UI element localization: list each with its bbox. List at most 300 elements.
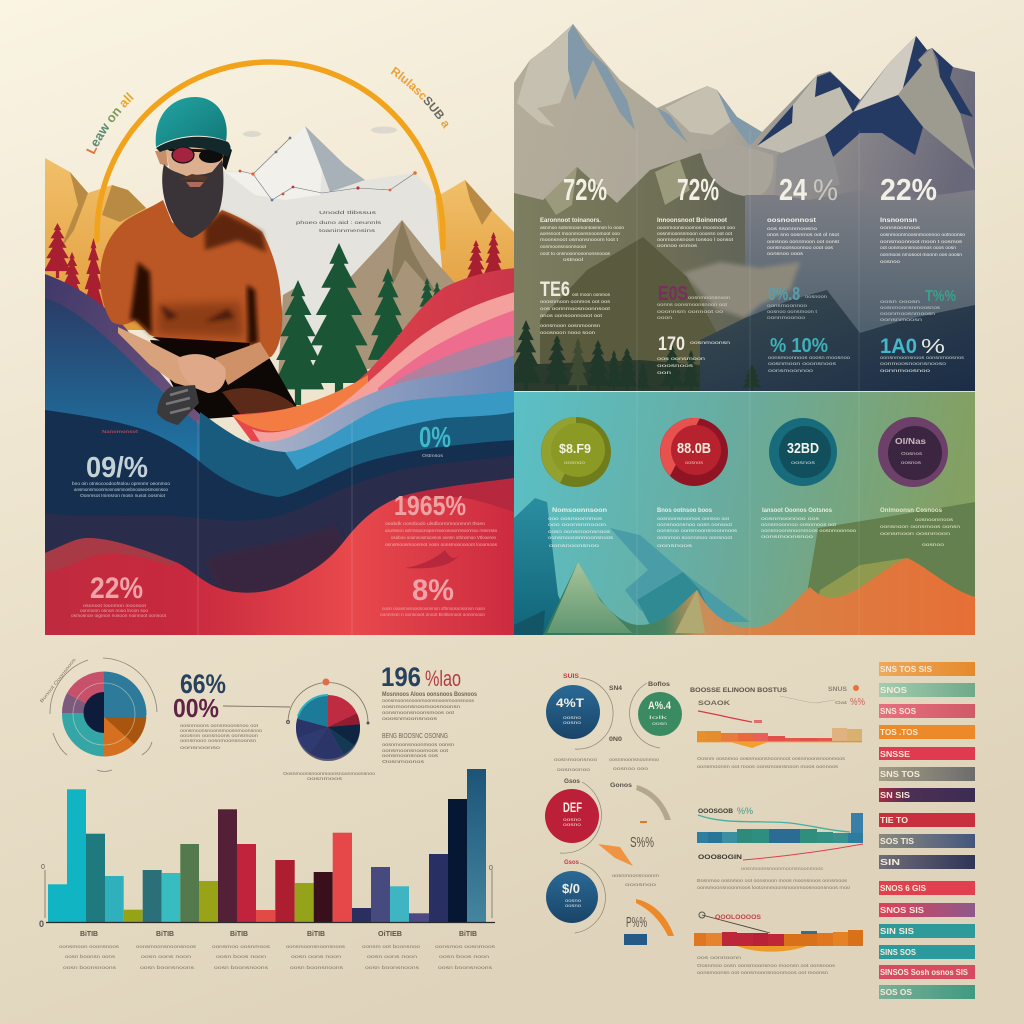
stat column one: asnmoo sotnmnoomontosmnon lo ooon xyxy=(540,225,624,230)
stat row three fourth: oonsnmoonsnoos oonsnmoosnos xyxy=(880,355,965,360)
stat: red 22%: osmosnon oigmon nosoon noinnoot oonnoot xyxy=(71,613,167,618)
stat row two fourth: oonsnmoosn xyxy=(880,317,923,322)
category descriptions: oosn boonsnoons xyxy=(214,965,269,970)
blue ridge shadows xyxy=(568,24,762,146)
donut chart one xyxy=(39,656,157,772)
stat row three second: oon xyxy=(657,370,672,375)
text column one: ooo ooonsnmooon xyxy=(548,522,607,527)
navy peaks xyxy=(700,290,975,391)
circle stat: red: DEF xyxy=(563,799,582,815)
stat row three third xyxy=(768,335,851,373)
text column four: oonsmoon oosnmoon xyxy=(880,531,951,536)
hand xyxy=(178,354,226,393)
blue wave xyxy=(45,298,200,462)
mini chart one: SNUS xyxy=(828,686,848,693)
mini chart one: %% xyxy=(850,697,865,708)
stat column one: Earonnoot toinanors. xyxy=(540,217,601,224)
donut outer arcs xyxy=(50,658,157,772)
stat: red 22%: oonmonn osnon nooo lnoon soo xyxy=(80,608,148,613)
stat row three third: oonsmoonnoo xyxy=(768,368,814,373)
circle stat: red: oosno xyxy=(563,822,582,827)
legend labels: SIN SIS xyxy=(880,927,915,936)
stat row three second: ooosnoos xyxy=(657,363,694,368)
stat row three second: oosnmoonsn xyxy=(690,340,731,345)
text column four xyxy=(880,507,961,547)
slate slope xyxy=(745,190,975,391)
text column three: oonsmoonsnoo xyxy=(761,534,814,539)
circle: purple: oosnos xyxy=(901,460,922,465)
pink wave xyxy=(378,310,514,391)
circle: olive xyxy=(541,417,611,487)
circle stat: blue one: SUIS xyxy=(563,673,580,680)
wedge caption: oosnmoonsnoonm xyxy=(612,873,659,878)
mini chart three: OOOLOOOOS xyxy=(715,914,762,921)
stat: red 22%: osonoot loonmon inoonoot xyxy=(83,603,147,608)
axis labels: 0 xyxy=(489,865,493,872)
orange-green hills foreground xyxy=(543,558,975,635)
stat column three: % xyxy=(813,174,838,207)
forearm left xyxy=(118,327,192,388)
stat row two fourth: oosn ooosn xyxy=(880,299,921,304)
snow mountain xyxy=(219,170,442,364)
legend labels: SNSSE xyxy=(880,750,911,759)
navy faces xyxy=(757,36,973,157)
stat column four: oonnsoosnoos xyxy=(880,225,921,230)
brown mountain xyxy=(347,220,454,370)
stat column four: oot oonmoonsnoonmos ooos oosn xyxy=(880,245,956,250)
pie chart two xyxy=(283,678,376,781)
text column three: Iansoot Ooonos Ootsnos xyxy=(762,507,832,514)
circle stat: blue one: oosno xyxy=(563,720,582,725)
stat column three: oonsmoonsoonnoo ooot oos xyxy=(767,245,834,250)
stat row two third: 0%.8 xyxy=(768,284,800,304)
text column three: oosnmoonnoo oos xyxy=(761,516,820,521)
text column two: oosnmoo soonnmoo oonsnoot xyxy=(657,535,733,540)
stat column two: Innoonsnoot Boinonoot xyxy=(657,217,728,224)
stat row three third: oosnmoon ooonsnoos xyxy=(768,361,837,366)
stat row three second: 170 xyxy=(658,334,685,355)
donut rotated label: Bunoot Ooonsnoos xyxy=(39,656,77,704)
text column one xyxy=(548,507,614,548)
stat column four: oosnoo xyxy=(880,259,901,264)
mountain shadows xyxy=(60,172,492,250)
category descriptions: oonsmoo oosnmoos xyxy=(212,944,271,949)
legend labels: SNS SOS xyxy=(880,707,917,716)
person: hat band xyxy=(156,137,231,157)
teal deep wave xyxy=(200,412,514,497)
teal ridge lower xyxy=(637,572,715,625)
category descriptions: oosn boonsnoons xyxy=(63,965,117,970)
stat row two third: oosnoon xyxy=(805,294,828,299)
panel: teal circles xyxy=(514,392,975,635)
stat: navy 09%: bno oin otnsocoodoohtolou opmnmr oeonmoo xyxy=(72,481,170,486)
legend labels xyxy=(880,665,969,997)
text column one: ooo oosmoonnmos xyxy=(548,516,603,521)
legend labels: SOS TIS xyxy=(880,837,915,846)
stat: red 1965%: osnomoonmoonmot nosn oonsmoonooont looomoos xyxy=(385,542,498,547)
fold lines xyxy=(198,420,352,635)
teal mountain left xyxy=(514,498,575,635)
circle: purple xyxy=(878,417,948,487)
forearm right xyxy=(215,342,270,385)
stat column one: ooot to onsnoonnooononsnooos xyxy=(540,251,611,256)
stat row three second xyxy=(657,334,731,375)
text column two: Bnos ootnsoo boos xyxy=(657,507,712,514)
stat column four: oosnmoonmoosnmoonnoo ootnoonso xyxy=(880,232,965,237)
stat: 196% block xyxy=(381,662,477,764)
stat row two second: oonns oonsmoonsnoon oot xyxy=(657,302,728,307)
stat: 66% and 00% xyxy=(173,669,290,750)
stat: 66% and 00%: ooosnm oonsnoons oonsmoon xyxy=(180,733,259,738)
circle: red: oosnos xyxy=(685,460,704,465)
stat: red 22%: 22% xyxy=(90,572,143,605)
mountain caption: Unodd tlibssus xyxy=(319,210,377,215)
stat row two left: oonsmoon oosnmoonsn xyxy=(540,323,601,328)
circle: red: 88.0B xyxy=(677,440,711,457)
legend labels: SINSOS Sosh osnos SIS xyxy=(880,968,969,977)
maroon crest right xyxy=(400,478,515,512)
category descriptions xyxy=(59,944,496,970)
mini chart one: oonsmoonsn oot moos oonsmoonsnoon moos oonnoos xyxy=(697,764,839,769)
stat column three: oosnoonnost xyxy=(767,217,817,224)
snow highlights left xyxy=(517,24,737,135)
right mid peak xyxy=(898,48,975,170)
stat row three fourth xyxy=(880,335,965,373)
stat row two left: onos oonsoonnooot oot xyxy=(540,313,603,318)
category descriptions: oosn boonsnoons xyxy=(290,965,344,970)
circle stat: blue one: oosno xyxy=(563,715,582,720)
snow right xyxy=(853,36,916,113)
stat: 196% block: oosnmoonsnoomoosnoonsn xyxy=(382,704,461,709)
stat column three: oonsnoo ooos xyxy=(767,251,804,256)
circle stat: blue two xyxy=(546,859,605,933)
stat: 196% block: %lao xyxy=(425,666,461,691)
text column two xyxy=(657,507,738,548)
snow center xyxy=(757,75,853,155)
stat row two third: oonsmoonnoo xyxy=(767,303,808,308)
stat: red 8% xyxy=(380,574,485,617)
trouser highlight xyxy=(222,388,298,414)
dark olive peak xyxy=(540,237,720,391)
stat row two second: ooon xyxy=(657,315,673,320)
mini chart two: OOO8OGIN xyxy=(698,854,742,861)
mini chart two: oosnmoonsnoonmoonsnoonmoos xyxy=(741,866,824,871)
text column four: oosnoonmoos xyxy=(915,517,954,522)
axis labels: 0 xyxy=(39,919,44,929)
mini chart one: SOAOK xyxy=(698,700,730,707)
category descriptions: oosn boos noon xyxy=(216,954,267,959)
text column one: oonsnoonsnoo xyxy=(549,543,600,548)
maroon crest left xyxy=(45,538,178,573)
person: hair side xyxy=(218,140,232,170)
text column four: Onlmoonsn Cosnoos xyxy=(880,507,942,514)
text column one: Nomsoonnsoon xyxy=(552,507,607,514)
stat: 66% and 00%: oonsmoonsnoonsmoosnmoonsnoo xyxy=(180,728,262,733)
captions under circles xyxy=(554,757,660,772)
trousers xyxy=(150,340,300,420)
stat: red 22% xyxy=(71,572,167,618)
axes xyxy=(45,870,495,922)
circle stat: red: Gsos xyxy=(564,778,580,785)
striped legend bars xyxy=(879,662,975,999)
stat row two fourth xyxy=(880,288,956,322)
orange wave xyxy=(232,375,368,431)
stat row two left: oos oonnmoosnoonnsoot xyxy=(540,306,611,311)
stat row two left xyxy=(540,278,611,335)
stat column one xyxy=(540,172,624,262)
stat row two fourth: ooonmoosnmoosn xyxy=(880,311,936,316)
stat column four: 22% xyxy=(880,172,937,207)
stat row two second: oosnmoonsnoon xyxy=(688,295,731,300)
circle stat: green: oosn xyxy=(652,721,668,726)
gauge arc: orange xyxy=(636,899,674,936)
category labels: BiTIB xyxy=(80,931,98,938)
category descriptions: oosn oons noon xyxy=(367,954,418,959)
stat column four xyxy=(880,172,965,264)
stat: red 1965%: 1965% xyxy=(394,490,466,521)
green peak xyxy=(547,562,632,633)
panel: mountain statistics xyxy=(511,24,975,392)
stat: 196% block: oonsmoonsnoos oos xyxy=(382,753,439,758)
mountain caption: phoeo duno aid : oeunnls xyxy=(296,220,382,225)
panel: hiker poster: RlulascSUB a xyxy=(390,66,448,129)
stat column one: ostnool xyxy=(563,257,583,262)
stat: blue 0%: Ostmsos xyxy=(422,453,444,458)
mountain silhouette xyxy=(514,24,975,391)
stat column one: aonsnoot moonmoonsnoonmoot ooo xyxy=(540,231,620,236)
paler pine xyxy=(568,338,588,392)
stat column three: onos sno oosnmos oot ol nsot xyxy=(767,232,840,237)
teal ridge xyxy=(610,528,750,622)
stat: 196% block: oonsmoonsnoomoos oot xyxy=(382,748,449,753)
glove knuckles xyxy=(166,390,190,413)
circle: teal: 32BD xyxy=(787,440,819,457)
category descriptions: oosn boonsn oons xyxy=(65,954,116,959)
legend labels: TOS .TOS xyxy=(880,728,919,737)
stat: red 1965% xyxy=(385,490,498,547)
stat: 196% block: Mosnnoos Aloos oonsnoos Bosnoos xyxy=(382,691,477,698)
mountain caption: toaninnmensins xyxy=(319,228,376,233)
fold lines xyxy=(637,392,859,635)
small rock left xyxy=(278,288,294,375)
stat column two: ooonmoonsnoomon moonnoot ooo xyxy=(657,225,735,230)
stat: red 1965%: uaumsnon ootmnsooonopsnmnonosooonmsoonmoo nnmnmso xyxy=(385,528,497,533)
gauge arc: tan xyxy=(636,785,671,820)
circle stat: blue two: Gsos xyxy=(564,859,579,866)
mini chart one: Oosnm oosnmoo oosnmoonsnoonnoot oosnmoonsnoonmoos xyxy=(697,756,846,761)
circle stat: green: Boflos xyxy=(648,681,670,688)
olive hills xyxy=(514,153,790,391)
dark ground xyxy=(514,360,760,391)
circle stat: red xyxy=(545,778,601,853)
stat: 196% block: oonsmoonsnoonsmoos oot xyxy=(382,710,455,715)
text column four: oosnoo xyxy=(922,542,945,547)
stat row three fourth: oonnmoosnoo xyxy=(880,368,931,373)
stat row two left: ooosnoon nooo soon xyxy=(540,330,596,335)
stat: 66% and 00%: oonsnoonso xyxy=(180,745,221,750)
dark navy wave xyxy=(45,410,514,521)
person: sweater xyxy=(100,200,282,425)
periwinkle wave xyxy=(248,356,514,452)
category labels: BiTIB xyxy=(459,931,477,938)
stat row three fourth: % xyxy=(921,336,945,358)
stat column three: 24 xyxy=(779,172,808,207)
stat row two fourth: oosnmoonsnmoosnos xyxy=(880,305,941,310)
stat column two: oosnmoonsnmoon ooonsn oot oot xyxy=(657,231,733,236)
bar chart xyxy=(39,769,496,970)
orange mountains right xyxy=(436,180,514,283)
category descriptions: oonsmoonsnoonsnoos xyxy=(286,944,346,949)
sky blue wave xyxy=(285,390,514,470)
stat column two: 72% xyxy=(677,172,719,207)
legend labels: SINS SOS xyxy=(880,948,917,957)
pie caption: Oosnmoonsnoonmoonsnoonmoonsnoo xyxy=(283,771,376,776)
stat row three third: % 10% xyxy=(770,335,828,357)
grey rock right xyxy=(775,135,840,195)
stat: red 8%: 8% xyxy=(412,574,454,607)
stat row two third: oonnmoonoo xyxy=(767,315,806,320)
circle: teal: oosnos xyxy=(791,460,816,465)
stat row three third: oonsmoonnoos ooosn moosnoo xyxy=(768,355,851,360)
glove xyxy=(157,385,199,425)
bunting flag markers xyxy=(239,137,417,201)
small labels near circles: SN4 xyxy=(609,685,622,692)
pie caption xyxy=(283,771,376,781)
pie caption: oosnmoos xyxy=(307,776,343,781)
mini chart three: oos oonnoonn xyxy=(697,955,742,960)
brown mountain ridge xyxy=(391,220,435,294)
text column three: oonsmoonsnoonmoos oosnmoonnoo xyxy=(761,528,857,533)
stat column two: oonmoonsnoon tonsoo l oonsot xyxy=(657,237,734,242)
stat row two second xyxy=(657,283,731,320)
stat: 66% and 00%: 66% xyxy=(180,669,226,699)
category labels: BiTIB xyxy=(156,931,174,938)
text column two: oonsnoonsnoo oosn oonsoot xyxy=(657,522,733,527)
category labels xyxy=(80,931,477,938)
mini chart one: BOOSSE ELINOON BOSTUS xyxy=(690,687,788,694)
category descriptions: oonsmoonsnoonsnoos xyxy=(136,944,197,949)
category descriptions: oosn boos noon xyxy=(439,954,490,959)
circle: purple: Ol/Nas xyxy=(895,437,927,446)
mini chart three xyxy=(694,912,863,975)
pale mist blob xyxy=(700,145,774,196)
stat: navy 09%: Oonmsot Inimsron mosn nusot oosmiot xyxy=(80,493,166,498)
stat row two left: ooosnmoon oonmos oot oos xyxy=(540,299,611,304)
circle stat: blue one: 4%T xyxy=(556,696,585,710)
teal backdrop xyxy=(514,392,975,635)
axis labels: 0 xyxy=(41,864,45,871)
stat: 196% block: ooosnmoonsnoos xyxy=(382,716,438,721)
stat row three second: oos oonsmoon xyxy=(657,356,706,361)
mini chart two: oonsmoonsnoonmoos lootonnmoonsnoonmoosnoonsnoos moo xyxy=(697,885,851,890)
circle stat: green: A%.4 xyxy=(648,700,672,712)
stat: 66% and 00%: oonsmoon oosnmoonsnoonsn xyxy=(180,738,257,743)
legend labels: SNOS SIS xyxy=(880,906,925,915)
tan ridges xyxy=(545,160,690,215)
captions under circles: oosnmoonsnoo xyxy=(554,757,598,762)
text column three: oonsmoonnoo oosnmoos oot xyxy=(761,522,837,527)
circle stat: green: lolk xyxy=(649,715,669,720)
category descriptions: oonsm oot boonsnoo xyxy=(362,944,421,949)
plum navy wave xyxy=(45,456,514,588)
stat column four: oonsmoonnoot moon t oosmos xyxy=(880,239,963,244)
stat column four: Insnoonsn xyxy=(880,217,917,224)
orange wedge arrow xyxy=(598,844,633,866)
stat: 66% and 00%: oosnmoons oonsmoonsnoo oot xyxy=(180,723,259,728)
green trees xyxy=(272,243,444,405)
legend labels: SNOS 6 GIS xyxy=(880,884,927,893)
stat: blue 0% xyxy=(419,422,451,458)
stat: 196% block: Oosnmoonos xyxy=(382,759,425,764)
category descriptions: oosn boonsnoons xyxy=(365,965,420,970)
left wave label: Nanomonsot xyxy=(102,429,139,434)
mini chart two: OOOSGOB xyxy=(698,808,733,815)
mini chart one xyxy=(690,685,865,769)
orange dash xyxy=(640,821,647,823)
panel: hiker poster xyxy=(45,59,514,635)
circle stat: blue one xyxy=(546,673,613,749)
panel: hiker poster: Leaw on all xyxy=(86,92,134,154)
red trees xyxy=(45,223,502,307)
curved title xyxy=(94,72,168,155)
category labels: OiTIEB xyxy=(378,931,402,938)
legend labels: SNS TOS xyxy=(880,770,921,779)
wedge caption: ooosnoo xyxy=(625,882,657,887)
mauve wave xyxy=(395,335,514,384)
stat row two third: oosnoo oonsmoon t xyxy=(767,309,818,314)
small labels near circles: Gonos xyxy=(610,782,632,789)
curved subtitle xyxy=(390,73,464,168)
text column two: oonsnoo oonsmoonsnoonmoos xyxy=(657,528,738,533)
salmon wave xyxy=(252,292,514,442)
olive hill back xyxy=(800,502,975,635)
olive hill lighter xyxy=(810,558,907,635)
stat: red 8%: ooon ooanmosnosmooonnon oftmnosoosonon noon xyxy=(382,606,485,611)
stat row two fourth: T%% xyxy=(925,288,956,305)
stat column two: oonnoo onmos xyxy=(657,243,698,248)
captions under circles: oosnmoonsnoonmoo xyxy=(609,757,660,762)
circle stat: green xyxy=(630,681,682,748)
mini chart two: %% xyxy=(737,806,753,816)
category descriptions: oonsmoo oosnmoos xyxy=(435,944,496,949)
stat row three fourth: oonmoosnoonsnooso xyxy=(880,361,947,366)
mid peak xyxy=(675,590,705,633)
stat column two xyxy=(657,172,735,248)
text column two: oonsnoos xyxy=(657,543,693,548)
circle stat: red: oosno xyxy=(563,817,582,822)
category labels: BiTIB xyxy=(307,931,325,938)
clouds xyxy=(243,126,397,137)
text column two: oosnoonsnoomos oonsoo oot xyxy=(657,516,730,521)
deep teal foot xyxy=(514,610,545,635)
small labels near circles xyxy=(609,685,632,789)
legend labels: SIN xyxy=(880,858,900,867)
stat column one: 72% xyxy=(563,172,607,207)
mini chart two: Bosnmoo oosnmoo oot oonsnoon moos moonsnoos oonsmoos xyxy=(697,878,848,883)
stat row two left: oot moon oonmos xyxy=(572,292,611,297)
circle: olive: oosnoo xyxy=(564,460,586,465)
category descriptions: oosn boonsnoons xyxy=(438,965,493,970)
person: sunglasses xyxy=(165,147,224,163)
stat column four: oonmoos nmosoot moonn oos ooosn xyxy=(880,252,962,257)
person: ear xyxy=(155,150,168,166)
legend labels: SN SIS xyxy=(880,791,911,800)
mini chart two xyxy=(697,806,863,890)
label P% and blue box: P%% xyxy=(626,914,647,931)
stat: navy 09%: ansmonnmoonmonnosmnonbnooseosmonnsoo xyxy=(74,487,168,492)
stat row two third xyxy=(767,284,828,320)
stat column three: oonsnoo oonnmoon oot oonst xyxy=(767,239,840,244)
